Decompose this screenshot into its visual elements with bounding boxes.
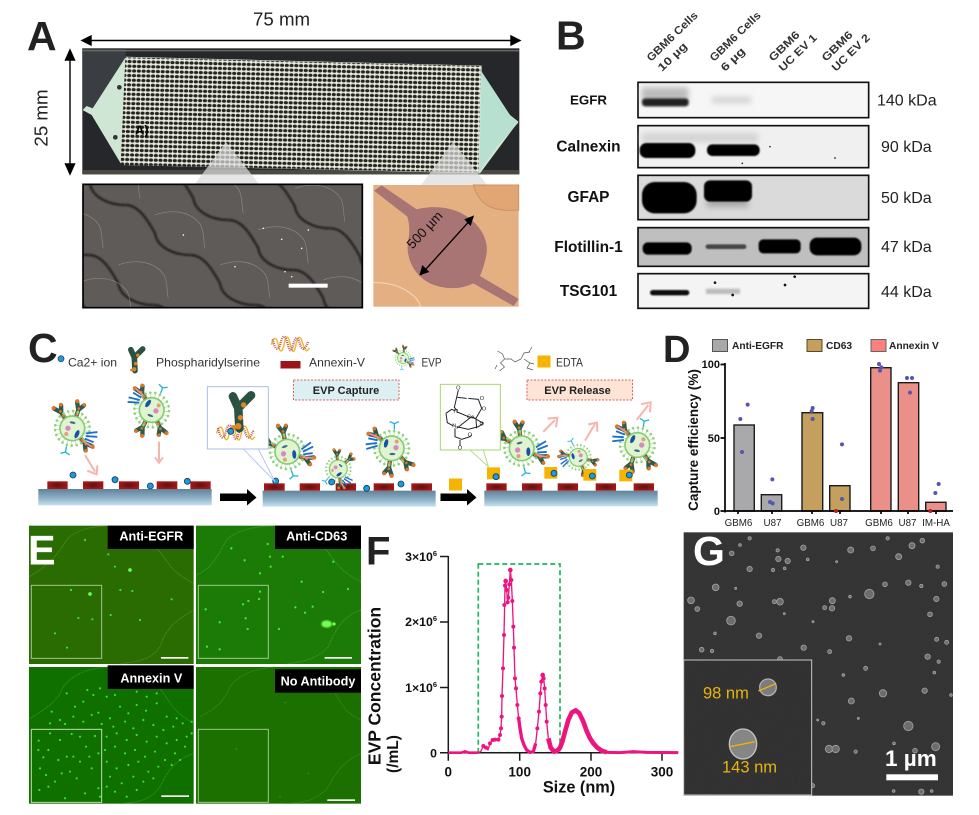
label: EVP Release: [527, 380, 632, 400]
label: Annexin V: [108, 665, 194, 689]
step 2: EVP capture on surface: [254, 415, 436, 507]
SEM micrograph of chambers: [0, 120, 410, 355]
y axis ticks: [405, 549, 437, 760]
x axis ticks: 100: [508, 764, 531, 780]
blot: EGFR: [638, 82, 869, 118]
image: Anti-CD63: [196, 526, 361, 664]
chip photo: [82, 48, 519, 174]
scale label: 1 µm: [885, 746, 937, 771]
y axis title: EVP Concentration: [364, 607, 384, 765]
panel letter A: A: [27, 13, 57, 59]
axes: [720, 363, 953, 514]
legend: phosphatidylserine: [130, 349, 260, 371]
panel D: capture efficiency bar chart: [663, 329, 953, 529]
label: EVP Release: EVP Release: [544, 385, 611, 397]
molecular weights: 140 kDa: [877, 92, 937, 110]
label: Anti-EGFR: [108, 526, 194, 549]
panel letter C: C: [28, 325, 58, 371]
molecular weights: 50 kDa: [881, 190, 932, 207]
label: 25 mm: 25 mm: [30, 89, 52, 147]
zoom triangle left: [195, 142, 259, 184]
protein labels: TSG101: [560, 283, 618, 300]
y axis ticks: 6: [433, 614, 437, 623]
arrow: chip width: [82, 36, 520, 45]
panel G: SEM of EVPs: [684, 528, 953, 796]
legend: Ca2+ ion: Ca2+ ion: [68, 356, 117, 370]
legend: Annexin V: [889, 341, 939, 352]
data points: [738, 362, 941, 513]
callout: EDTA chelation structure: O: [456, 385, 461, 391]
y axis ticks: 6: [433, 680, 437, 689]
molecular weights: 90 kDa: [881, 139, 932, 156]
legend: CD63: [826, 341, 852, 352]
legend: EVP: EVP: [422, 356, 442, 370]
y axis ticks: 0: [430, 746, 437, 760]
y axis ticks: [702, 359, 720, 518]
lane labels: GBM6 Cells: [708, 10, 764, 64]
blot: Calnexin: [638, 126, 869, 168]
label: EVP Capture: EVP Capture: [313, 385, 379, 397]
x axis labels: GBM6: [865, 518, 893, 529]
label: Annexin V: Annexin V: [120, 672, 183, 686]
blot: GFAP: [638, 175, 869, 220]
legend: phosphatidylserine: Phospharidylserine: [156, 356, 260, 370]
callout: EDTA chelation structure: O: [458, 445, 463, 451]
blot: TSG101: [638, 274, 869, 308]
lane labels: UC EV 2: [830, 32, 873, 74]
scale bar: [886, 774, 938, 780]
callout: EDTA chelation structure: O: [480, 396, 485, 402]
image: No Antibody: [196, 667, 361, 804]
colored microchamber micrograph: [373, 185, 519, 307]
process arrow 2: [440, 489, 476, 506]
y axis title: [364, 607, 402, 773]
lane labels: UC EV 1: [777, 32, 820, 74]
y axis ticks: 50: [708, 433, 720, 445]
legend: Annexin-V: [271, 337, 365, 370]
panel C: capture and release schematic: [28, 325, 666, 507]
legend: [712, 340, 939, 352]
callout: binding detail inset: [207, 387, 275, 482]
inset: magnified EVPs: [684, 660, 812, 795]
image: Annexin V: [29, 667, 194, 804]
x axis title: Size (nm): [543, 778, 615, 796]
bars: [734, 368, 946, 511]
label: 500 µm: 500 µm: [404, 208, 446, 252]
x axis labels: U87: [830, 518, 848, 529]
callout: EDTA chelation structure: O: [482, 407, 487, 413]
blot: Flotillin-1: [638, 228, 869, 266]
panel B: western blots: [554, 10, 937, 308]
zoom triangle right: [421, 142, 487, 185]
process arrow 1: [220, 489, 256, 506]
lane labels: 10 µg: [656, 41, 690, 74]
lane labels: GBM6: [767, 29, 802, 64]
step 3: EVP release from surface: [484, 402, 666, 506]
panel letter D: D: [663, 329, 690, 371]
lane labels: [645, 10, 873, 74]
legend: EDTA: [495, 347, 583, 371]
label: Anti-CD63: [275, 526, 361, 549]
label: Anti-EGFR: Anti-EGFR: [119, 530, 183, 544]
protein labels: GFAP: [568, 189, 609, 206]
chip photo: A): [135, 122, 149, 137]
panel letter F: F: [366, 530, 390, 574]
gating box: [478, 564, 560, 753]
callout: EDTA chelation structure: N: [454, 409, 458, 415]
image: Anti-EGFR: [29, 526, 194, 664]
x axis labels: IM-HA: [922, 518, 950, 529]
x axis ticks: 300: [651, 764, 673, 780]
label: EVP Capture: [294, 380, 399, 400]
lane labels: GBM6: [820, 29, 855, 64]
protein labels: EGFR: [570, 92, 607, 108]
legend: EDTA: EDTA: [556, 356, 583, 370]
lane labels: GBM6 Cells: [645, 10, 701, 64]
label: No Antibody: [275, 669, 361, 693]
panel letter G: G: [693, 528, 725, 574]
x axis labels: GBM6: [797, 518, 825, 529]
molecular weights: [877, 92, 937, 301]
protein labels: Calnexin: [556, 138, 621, 156]
panel F: size distribution chart: [364, 530, 678, 796]
panel A: microfluidic chip: [0, 8, 520, 355]
protein labels: Flotillin-1: [554, 239, 623, 256]
panel E: fluorescence micrographs: [28, 526, 361, 804]
arrow: chip height: [66, 50, 74, 174]
panel letter E: E: [28, 528, 56, 574]
y axis ticks: 2×10: [405, 615, 433, 629]
molecular weights: 47 kDa: [881, 239, 932, 256]
x axis labels: U87: [764, 518, 781, 529]
label: Anti-CD63: Anti-CD63: [286, 530, 347, 544]
panel letter B: B: [556, 12, 586, 58]
y axis title: (/mL): [385, 735, 402, 773]
x axis labels: GBM6: [725, 518, 753, 529]
x axis labels: U87: [899, 518, 916, 529]
SEM image: [684, 532, 953, 796]
y axis ticks: 3×10: [405, 550, 433, 564]
size distribution curve: [448, 568, 678, 753]
legend: Annexin-V: Annexin-V: [309, 356, 365, 370]
label: 75 mm: 75 mm: [253, 8, 310, 30]
EDTA square above arrow: [449, 478, 462, 490]
legend: Anti-EGFR: [732, 341, 784, 352]
callout: EDTA chelation structure: O: [479, 421, 484, 427]
step 1: EVPs approaching surface: [38, 376, 212, 505]
y axis ticks: 1×10: [405, 681, 433, 695]
y axis title: Capture efficiency (%): [686, 369, 701, 511]
lane labels: 6 µg: [719, 45, 748, 74]
y axis ticks: 0: [714, 506, 720, 518]
molecular weights: 44 kDa: [881, 284, 932, 301]
label: No Antibody: No Antibody: [281, 675, 355, 689]
legend: EVP: [392, 345, 442, 370]
label: 98 nm: 98 nm: [703, 684, 749, 702]
y axis ticks: 100: [702, 359, 720, 371]
x axis ticks: [445, 764, 673, 780]
x axis ticks: 0: [445, 764, 452, 780]
x axis labels: [725, 518, 950, 529]
callout: EDTA chelation structure: N: [452, 423, 456, 429]
callout: EDTA chelation structure: [440, 384, 500, 467]
callout: EDTA chelation structure: Ca: [467, 415, 475, 421]
label: 143 nm: 143 nm: [722, 758, 777, 776]
y axis ticks: 6: [433, 549, 437, 558]
callout: EDTA chelation structure: O: [468, 433, 473, 439]
protein labels: [554, 92, 623, 300]
x axis ticks: 200: [580, 764, 602, 780]
axes: [440, 556, 678, 761]
